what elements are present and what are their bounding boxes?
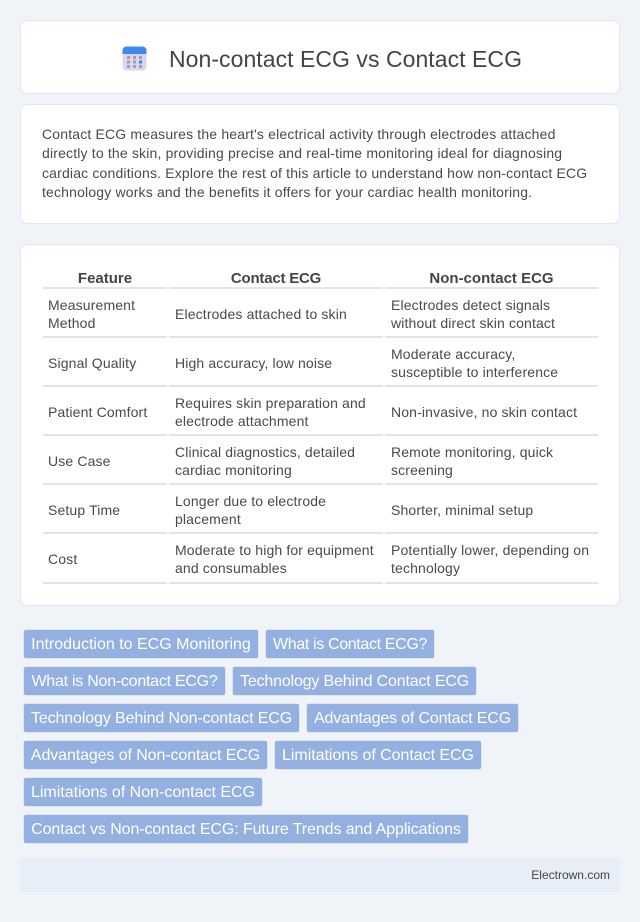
row: measurement method: Method [48,315,96,331]
intro panel [20,104,620,224]
icon: calendar grid [122,46,146,70]
row: use case: cardiac monitoring [175,462,292,478]
row: patient comfort: Requires skin preparation and [175,395,366,411]
tag: Introduction to ECG Monitoring [31,636,251,653]
tag [23,666,226,696]
row: signal quality: Moderate accuracy, [391,346,515,362]
tag: Technology Behind Non-contact ECG [31,710,292,727]
tag [23,629,259,659]
row: setup time: Shorter, minimal setup [391,502,533,518]
intro text: cardiac conditions. Explore the rest of this article to understand how non-contact ECG [42,165,587,181]
intro text: directly to the skin, providing precise and real-time monitoring ideal for diagnosing [42,145,562,161]
tag [306,703,519,733]
tag: Technology Behind Contact ECG [240,673,469,690]
row: setup time: Setup Time [48,502,120,518]
row: measurement method: without direct skin contact [391,315,555,331]
table header: Non-contact ECG [429,270,554,287]
comparison table panel [20,244,620,606]
table header: Contact ECG [231,270,321,287]
tag: What is Contact ECG? [273,636,427,653]
table header: Feature [78,270,132,287]
row: cost: Cost [48,551,77,567]
row: use case: Clinical diagnostics, detailed [175,444,355,460]
row: signal quality: High accuracy, low noise [175,355,332,371]
tag [274,740,482,770]
tag [232,666,477,696]
tag: Contact vs Non-contact ECG: Future Trends and Applications [31,821,461,838]
row: use case [48,444,553,478]
table header [78,270,554,287]
row: cost: technology [391,560,460,576]
row: measurement method: Measurement [48,297,135,313]
topic tags [23,629,519,844]
row: use case: Remote monitoring, quick [391,444,553,460]
tag: What is Non-contact ECG? [31,673,218,690]
row: signal quality [48,346,558,380]
row: use case: Use Case [48,453,111,469]
tag [23,703,300,733]
tag: Limitations of Non-contact ECG [31,784,255,801]
row: measurement method [48,297,555,331]
row: cost: Moderate to high for equipment [175,542,374,558]
header panel [20,20,620,94]
row: cost [48,542,589,576]
tag [265,629,435,659]
tag: Advantages of Contact ECG [314,710,511,727]
row: cost: and consumables [175,560,287,576]
row: setup time: Longer due to electrode [175,493,326,509]
row: patient comfort: Non-invasive, no skin contact [391,404,577,420]
row: measurement method: Electrodes attached to skin [175,306,347,322]
tag: Advantages of Non-contact ECG [31,747,260,764]
footer text: Electrown.com [531,868,610,882]
footer bar [20,858,620,892]
row: patient comfort: Patient Comfort [48,404,147,420]
row: measurement method: Electrodes detect signals [391,297,550,313]
row: setup time: placement [175,511,241,527]
row: patient comfort: electrode attachment [175,413,309,429]
tag [23,777,263,807]
row: setup time [48,493,533,527]
tag [23,814,469,844]
title: Non-contact ECG vs Contact ECG [169,46,522,72]
row: signal quality: Signal Quality [48,355,136,371]
tag [23,740,268,770]
intro text: Contact ECG measures the heart's electrical activity through electrodes attached [42,126,556,142]
row: cost: Potentially lower, depending on [391,542,589,558]
tag: Limitations of Contact ECG [282,747,474,764]
row: use case: screening [391,462,453,478]
row: patient comfort [48,395,577,429]
intro text [42,126,587,200]
intro text: technology works and the benefits it offers for your cardiac health monitoring. [42,184,532,200]
row: signal quality: susceptible to interference [391,364,558,380]
